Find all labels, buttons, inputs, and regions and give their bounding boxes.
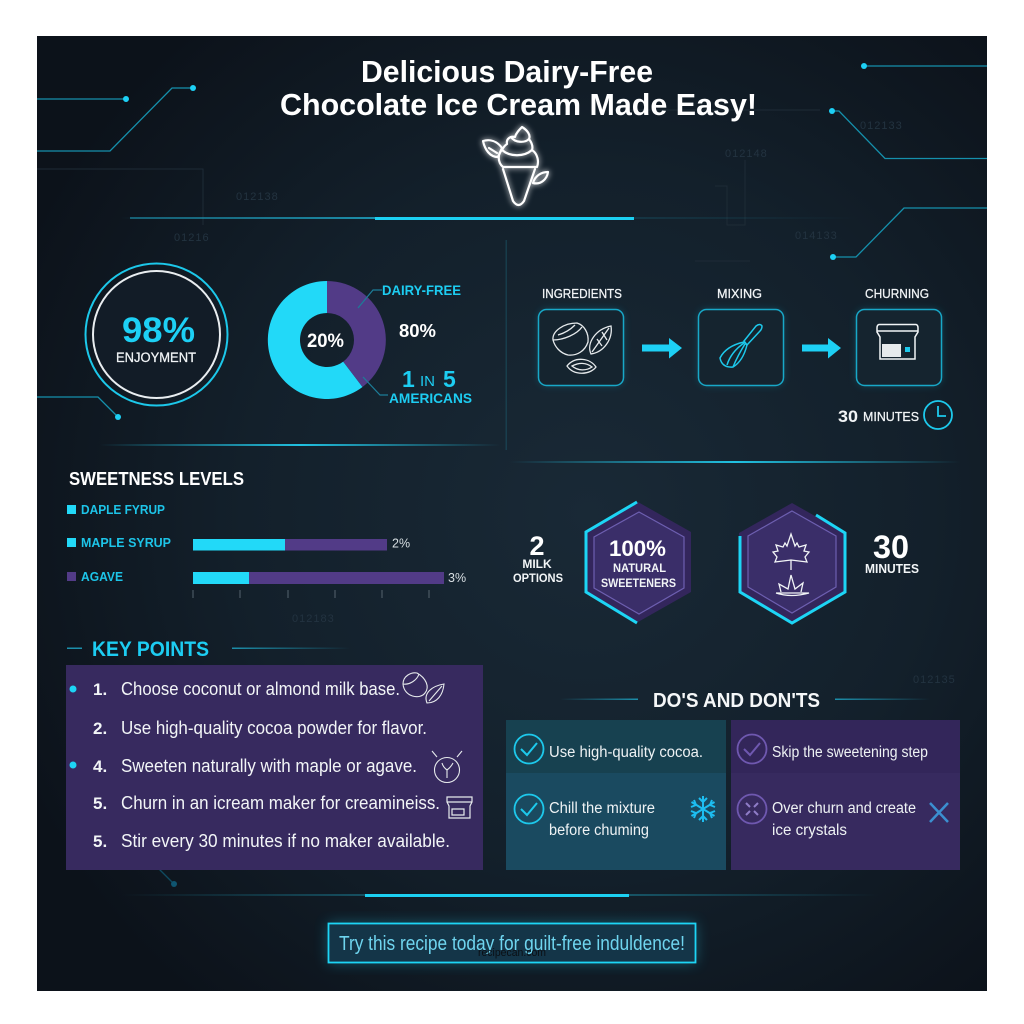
faint background digits: 012138 — [236, 191, 279, 203]
list items: 5. — [93, 832, 107, 851]
section dividers — [100, 240, 960, 463]
callout leaders — [358, 290, 388, 395]
thirty minutes stat — [865, 529, 919, 576]
milk options stat: OPTIONS — [513, 571, 563, 585]
step: churning: CHURNING — [865, 287, 929, 301]
hexagon: natural sweeteners: 100% — [609, 536, 666, 561]
faint background digits: 012148 — [725, 148, 768, 160]
hexagon: natural sweeteners: NATURAL — [613, 561, 666, 575]
thirty minutes timer: 30 — [838, 407, 858, 426]
icon: snowflake — [691, 796, 715, 822]
panel: do's: Use high-quality cocoa. — [549, 744, 703, 761]
milk options stat — [513, 531, 563, 585]
do's and don'ts section — [506, 690, 960, 870]
dairy-free label: DAIRY-FREE — [382, 282, 461, 298]
top divider — [120, 217, 860, 220]
circuit decorations — [37, 63, 987, 887]
1 in 5 label — [402, 366, 456, 392]
process flow — [538, 287, 952, 429]
milk options stat: 2 — [529, 531, 545, 561]
title: Delicious Dairy-Free — [361, 54, 653, 89]
arrow — [802, 338, 841, 358]
call to action — [328, 923, 696, 963]
step: ingredients: INGREDIENTS — [542, 287, 622, 301]
panel: do's: before chuming — [549, 822, 649, 839]
step: mixing — [698, 287, 784, 386]
hexagon: natural sweeteners — [585, 502, 691, 623]
list items: Churn in an icream maker for creamineiss. — [121, 793, 440, 813]
axis ticks — [193, 590, 429, 598]
chart heading: SWEETNESS LEVELS — [69, 469, 244, 489]
list items: Choose coconut or almond milk base. — [121, 679, 400, 699]
1 in 5 label: IN — [420, 373, 435, 390]
list items: 2. — [93, 719, 107, 738]
icon: cross — [930, 803, 948, 822]
bar: agave — [193, 571, 466, 585]
key points heading: KEY POINTS — [92, 638, 209, 661]
panel: don'ts: ice crystals — [772, 822, 847, 839]
80 percent label: 80% — [399, 321, 436, 341]
list items: 4. — [93, 757, 107, 776]
arrow — [642, 338, 682, 358]
98 percent value: 98% — [122, 311, 195, 350]
1 in 5 label: 5 — [443, 366, 456, 392]
call to action: Try this recipe today for guilt-free induldence! — [339, 933, 685, 955]
1 in 5 label: 1 — [402, 366, 415, 392]
donut chart — [268, 281, 472, 406]
legend: MAPLE SYRUP — [81, 535, 171, 550]
panel: do's: Chill the mixture — [549, 800, 655, 817]
faint background digits — [174, 120, 956, 686]
legend: DAPLE FYRUP — [81, 502, 165, 517]
list items: 5. — [93, 794, 107, 813]
list items — [93, 679, 450, 851]
faint background digits: 012135 — [913, 674, 956, 686]
list items: Sweeten naturally with maple or agave. — [121, 756, 417, 776]
key points panel — [66, 665, 483, 870]
hexagon: maple leaf — [739, 503, 845, 623]
sweetness levels chart — [67, 469, 466, 598]
watermark: recipecan.com — [478, 947, 546, 959]
milk options stat: MILK — [522, 557, 552, 571]
icon: ice cream maker — [447, 797, 472, 818]
panel: don'ts — [731, 720, 960, 870]
thirty minutes timer — [838, 401, 952, 429]
title — [280, 54, 757, 122]
bar: agave: 3% — [448, 571, 466, 585]
panel: don'ts: Over churn and create — [772, 800, 916, 817]
icon: ice cream cone — [483, 127, 548, 205]
hexagon: natural sweeteners: SWEETENERS — [601, 576, 676, 590]
list items: Stir every 30 minutes if no maker available. — [121, 831, 450, 851]
step: ingredients — [538, 287, 624, 386]
faint background digits: 012183 — [292, 613, 335, 625]
list items: 1. — [93, 680, 107, 699]
legend — [67, 502, 171, 584]
icon: coconut and almond — [403, 673, 444, 703]
enjoyment label: ENJOYMENT — [116, 350, 196, 365]
faint background digits: 014133 — [795, 230, 838, 242]
thirty minutes stat: MINUTES — [865, 561, 919, 576]
thirty minutes stat: 30 — [873, 529, 909, 565]
faint background digits: 012133 — [860, 120, 903, 132]
faint background digits: 01216 — [174, 232, 210, 244]
section heading: DO'S AND DON'TS — [653, 690, 820, 712]
bar: maple syrup: 2% — [392, 536, 410, 550]
panel: don'ts: Skip the sweetening step — [772, 744, 928, 761]
americans label: AMERICANS — [389, 390, 472, 406]
key points section — [66, 638, 483, 870]
step: churning — [856, 287, 942, 386]
thirty minutes timer: MINUTES — [863, 409, 919, 424]
enjoyment ring stat — [86, 264, 228, 406]
title: Chocolate Ice Cream Made Easy! — [280, 87, 757, 122]
legend: AGAVE — [81, 569, 123, 584]
step: mixing: MIXING — [717, 287, 762, 301]
bullets — [70, 686, 76, 768]
bar: maple syrup — [193, 536, 410, 550]
donut center value: 20% — [307, 331, 344, 352]
icon: sprout timer — [432, 751, 462, 782]
bottom divider — [120, 894, 880, 897]
list items: Use high-quality cocoa powder for flavor. — [121, 718, 427, 738]
panel: do's — [506, 720, 726, 870]
